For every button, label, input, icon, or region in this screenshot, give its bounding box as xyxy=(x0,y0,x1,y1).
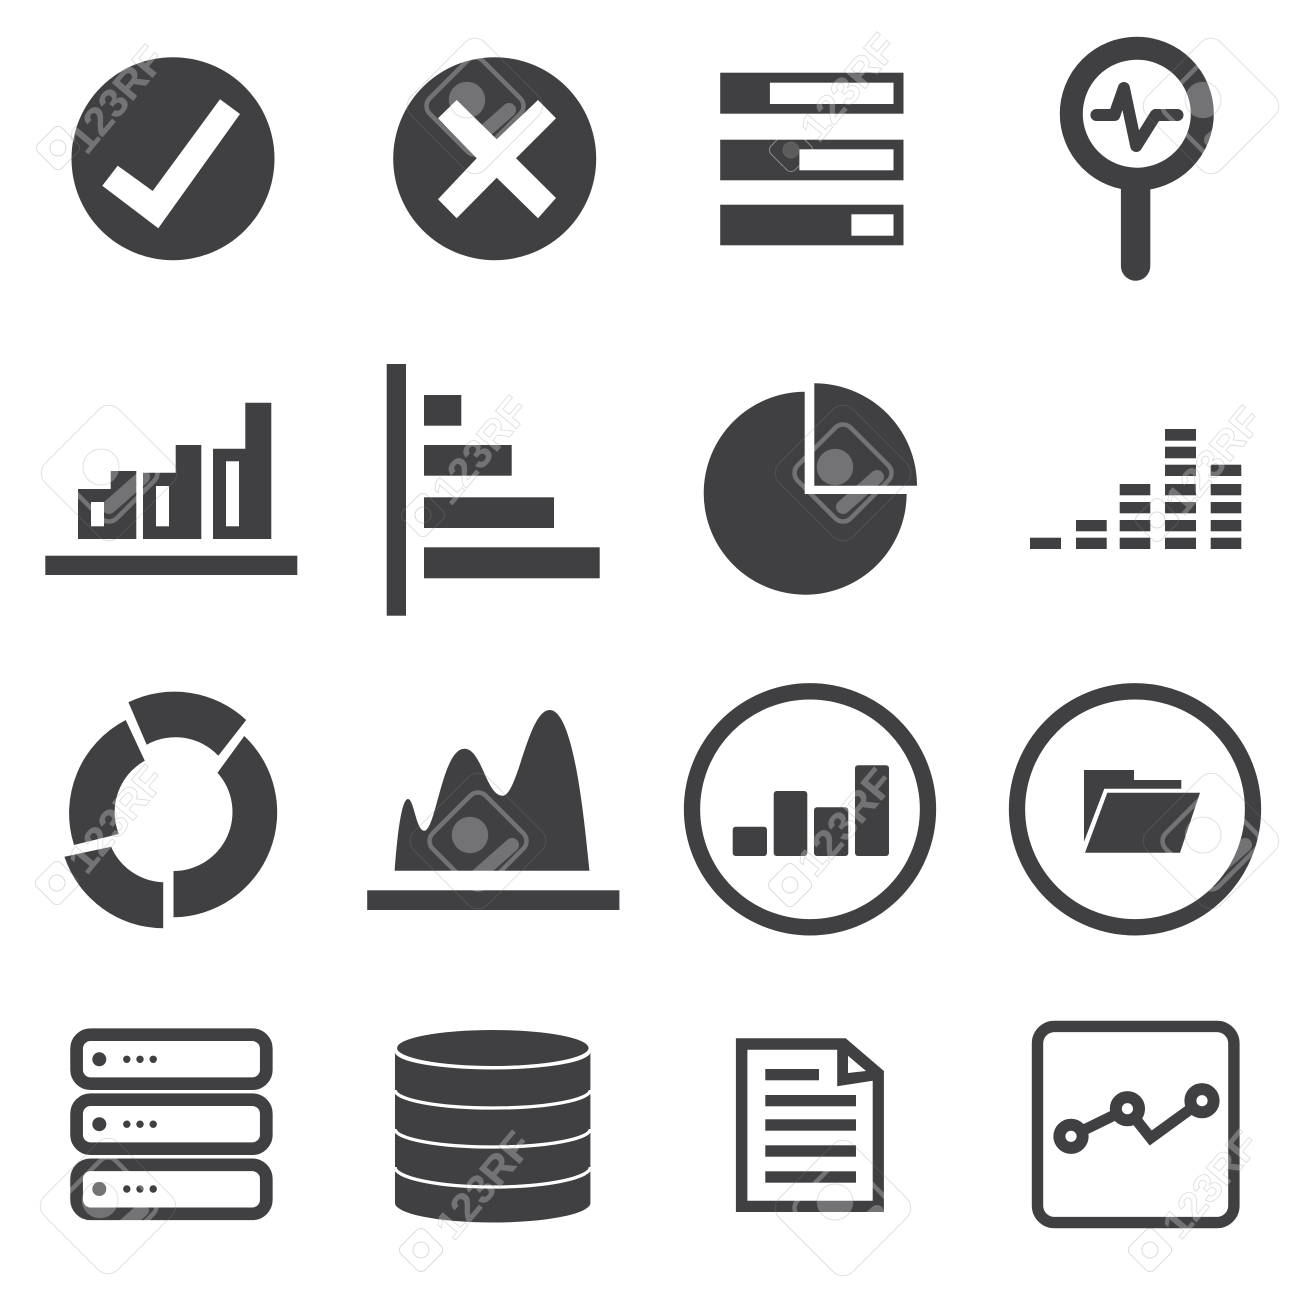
icon: pie chart xyxy=(704,383,917,595)
watermark text marks: 123RF xyxy=(1154,1123,1268,1247)
icon: stacked progress bars xyxy=(720,73,904,245)
watermark text marks: 123RF xyxy=(792,26,906,150)
watermark text marks: 123RF xyxy=(1157,399,1271,523)
icon: area chart xyxy=(367,710,619,910)
icon: database cylinder xyxy=(395,1030,590,1222)
watermark text marks: 123RF xyxy=(789,761,903,885)
icon: bar chart in circle xyxy=(692,691,928,927)
watermark small camera logos xyxy=(33,124,1181,1274)
icon: equalizer bars xyxy=(1030,429,1241,549)
icon: cross in circle xyxy=(393,57,596,260)
watermark text marks: 123RF xyxy=(427,1124,541,1248)
icon: folder in circle xyxy=(1017,691,1253,927)
icon: segmented donut chart xyxy=(64,692,277,928)
icon: text document xyxy=(736,1038,884,1212)
watermark text marks: 123RF xyxy=(60,758,174,882)
icon: server rack xyxy=(77,1035,266,1214)
icon: horizontal bar chart xyxy=(387,364,600,616)
icon: rising bar chart xyxy=(45,403,297,575)
watermark text marks: 123RF xyxy=(60,38,174,162)
icon: magnifier with pulse xyxy=(1071,48,1202,281)
watermark text marks: 123RF xyxy=(424,389,538,513)
icon: check mark in circle xyxy=(72,57,274,260)
icon: line chart in rounded square xyxy=(1038,1026,1234,1223)
